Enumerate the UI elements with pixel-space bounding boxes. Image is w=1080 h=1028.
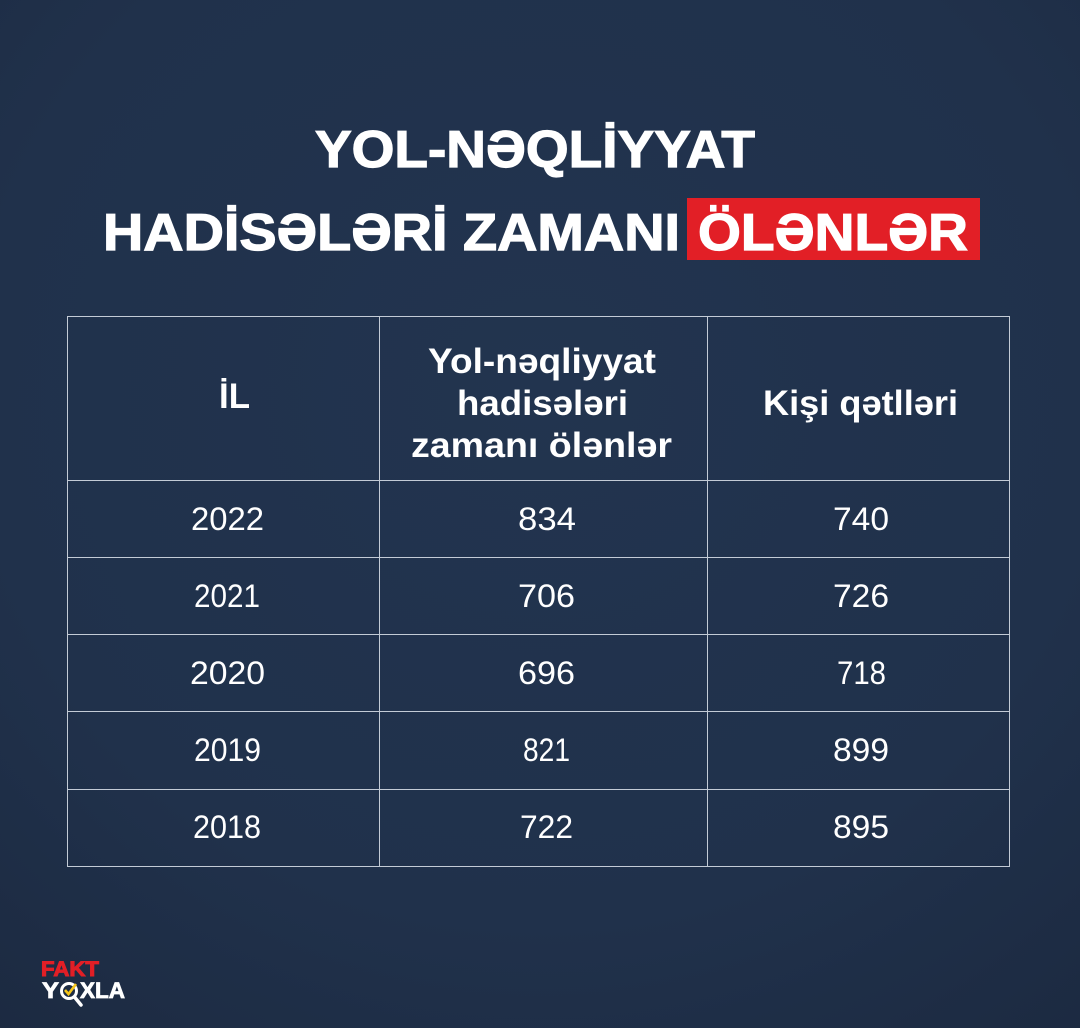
row: 2019 <box>194 732 889 768</box>
table header: İL <box>219 377 250 416</box>
title: HADİSƏLƏRİ ZAMANI <box>103 204 680 262</box>
table header <box>219 342 958 465</box>
data table <box>67 316 1010 866</box>
logo: Fakt Yoxla: XLA <box>80 978 125 1003</box>
row: 2022: 834 <box>518 501 576 537</box>
row: 2018: 2018 <box>193 809 261 845</box>
row: 2018: 895 <box>833 809 889 845</box>
table header: Kişi qətlləri <box>763 384 958 423</box>
table header: hadisələri <box>457 384 628 423</box>
title: YOL-NƏQLİYYAT <box>315 121 755 179</box>
row: 2022 <box>191 501 889 537</box>
row: 2021 <box>194 578 889 614</box>
row: 2019: 2019 <box>194 732 261 768</box>
row: 2019: 899 <box>833 732 889 768</box>
row: 2021: 726 <box>833 578 889 614</box>
row: 2021: 2021 <box>194 578 260 614</box>
table header: Yol-nəqliyyat <box>428 342 656 381</box>
title highlight: red label: ÖLƏNLƏR <box>698 204 968 262</box>
icon: magnifier with check mark <box>62 984 81 1005</box>
row: 2020 <box>190 655 886 691</box>
logo: Fakt Yoxla: FAKT <box>41 958 99 981</box>
title <box>103 121 980 262</box>
row: 2020: 718 <box>837 655 886 691</box>
row: 2022: 740 <box>833 501 889 537</box>
row: 2018 <box>193 809 889 845</box>
row: 2022: 2022 <box>191 501 264 537</box>
row: 2019: 821 <box>523 732 570 768</box>
table header: zamanı ölənlər <box>411 426 672 465</box>
row: 2018: 722 <box>520 809 573 845</box>
row: 2021: 706 <box>518 578 575 614</box>
row: 2020: 696 <box>518 655 575 691</box>
row: 2020: 2020 <box>190 655 265 691</box>
logo: Fakt Yoxla <box>41 958 125 1005</box>
logo: Fakt Yoxla: Y <box>42 978 59 1003</box>
